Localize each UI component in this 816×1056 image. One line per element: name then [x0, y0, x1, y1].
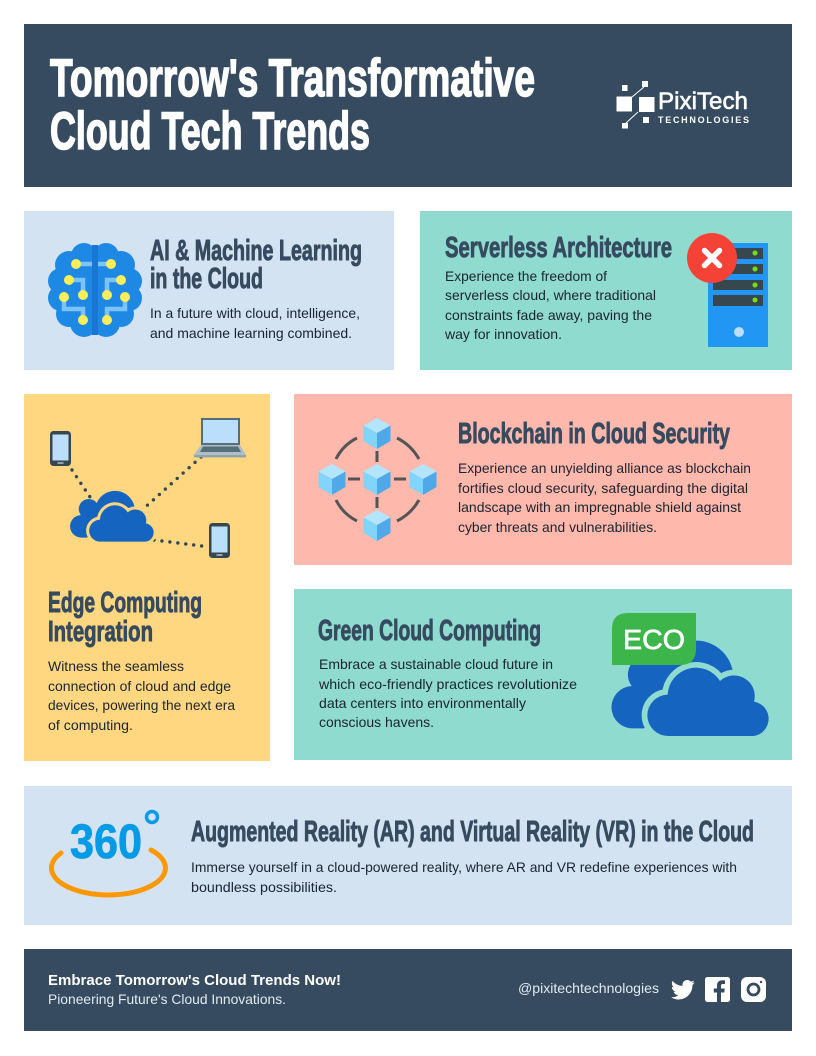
title: Cloud Tech Trends	[50, 102, 370, 161]
body text: devices, powering the next era	[48, 697, 235, 713]
panel: edge computing	[24, 394, 270, 761]
heading: in the Cloud	[150, 263, 263, 295]
body text: serverless cloud, where traditional	[445, 287, 656, 303]
heading	[150, 235, 362, 295]
body text: Witness the seamless	[48, 658, 184, 674]
body text	[444, 268, 656, 342]
icon: server with red cross	[687, 233, 768, 347]
body text	[318, 656, 577, 730]
body text	[150, 305, 360, 341]
call to action	[48, 973, 341, 1007]
icon: circuit brain	[48, 243, 142, 337]
body text: fortifies cloud security, safeguarding the digital	[458, 480, 748, 496]
heading: Integration	[48, 616, 153, 648]
body text	[458, 460, 751, 535]
logo: PixiTech: PixiTech	[658, 88, 748, 115]
heading: AI & Machine Learning	[150, 235, 362, 267]
icon: connected devices and cloud	[50, 418, 246, 558]
body text: boundless possibilities.	[191, 879, 337, 895]
heading: Serverless Architecture	[445, 232, 672, 264]
icon: eco cloud	[611, 613, 769, 736]
icon: facebook	[705, 977, 730, 1002]
call to action: Pioneering Future's Cloud Innovations.	[48, 991, 286, 1007]
heading: Green Cloud Computing	[318, 615, 541, 647]
heading	[48, 587, 202, 648]
title: Tomorrow's Transformative	[50, 49, 535, 108]
body text: Embrace a sustainable cloud future in	[319, 656, 553, 672]
panel: green cloud computing	[294, 589, 792, 760]
icon: blockchain network	[318, 418, 436, 541]
header banner	[24, 24, 792, 187]
heading: Edge Computing	[48, 587, 202, 619]
body text: cyber threats and vulnerabilities.	[458, 519, 657, 535]
body text: which eco-friendly practices revolutionize	[318, 676, 577, 692]
footer banner	[24, 949, 792, 1031]
panel: blockchain	[294, 394, 792, 565]
icon: 360 degrees: 360	[70, 816, 142, 869]
icon: eco cloud: ECO	[623, 624, 685, 655]
body text: constraints fade away, paving the	[445, 307, 652, 323]
body text: connection of cloud and edge	[48, 678, 231, 694]
logo: PixiTech	[616, 81, 749, 128]
body text: way for innovation.	[444, 326, 562, 342]
body text: conscious havens.	[319, 714, 434, 730]
body text: Experience an unyielding alliance as blockchain	[458, 460, 751, 476]
call to action: Embrace Tomorrow's Cloud Trends Now!	[48, 973, 341, 989]
logo: PixiTech: TECHNOLOGIES	[658, 115, 749, 125]
body text: In a future with cloud, intelligence,	[150, 305, 360, 321]
body text: landscape with an impregnable shield against	[458, 499, 741, 515]
body text: of computing.	[48, 717, 133, 733]
title	[50, 49, 535, 161]
body text	[191, 859, 737, 895]
social handle: @pixitechtechnologies	[518, 980, 659, 996]
body text	[48, 658, 235, 733]
body text: Immerse yourself in a cloud-powered reality, where AR and VR redefine experiences with	[191, 859, 737, 875]
icon: 360 degrees	[51, 812, 165, 895]
panel: serverless architecture	[420, 211, 792, 370]
body text: data centers into environmentally	[319, 695, 526, 711]
icon: instagram	[741, 977, 766, 1002]
body text: Experience the freedom of	[445, 268, 607, 284]
icon: twitter	[671, 980, 694, 999]
panel: AI and machine learning	[24, 211, 394, 370]
body text: and machine learning combined.	[150, 325, 352, 341]
panel: AR and VR	[24, 786, 792, 925]
